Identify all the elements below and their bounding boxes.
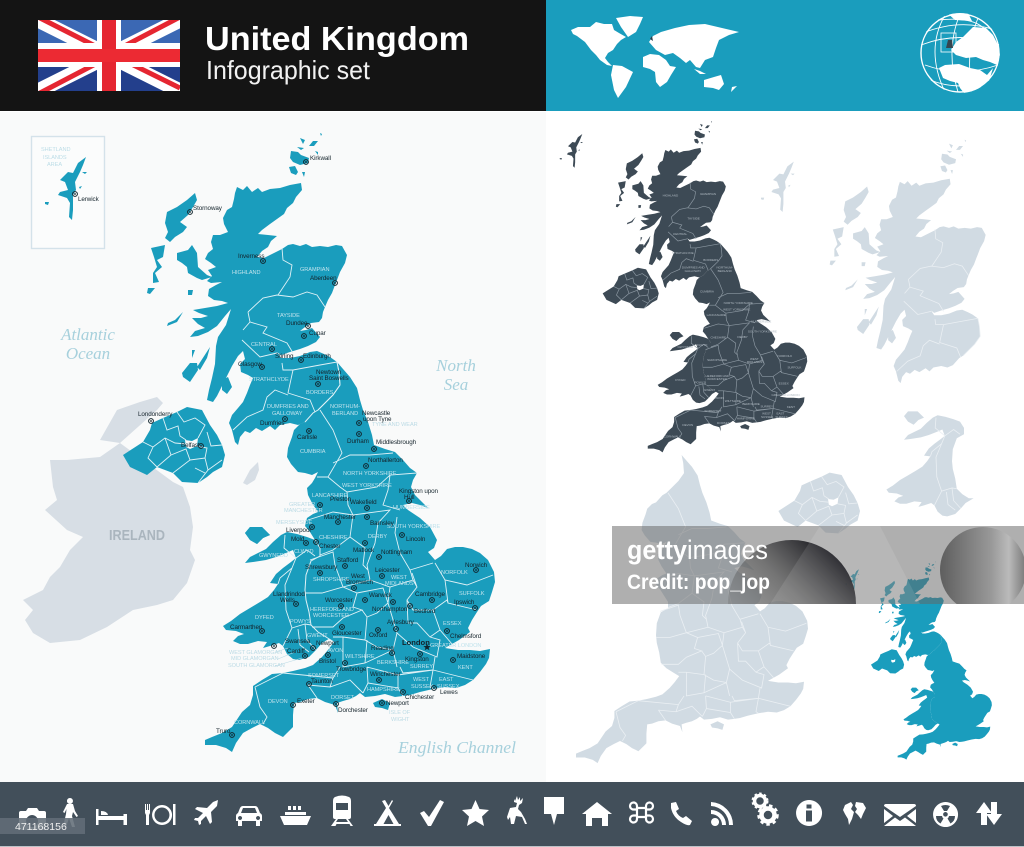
city names: Middlesbrough bbox=[376, 439, 417, 446]
city names: Bristol bbox=[319, 658, 336, 665]
city names: Nottingham bbox=[381, 549, 412, 556]
header: location panel bbox=[546, 0, 1024, 111]
icon: camera bbox=[19, 808, 46, 830]
city names: Aberdeen bbox=[310, 275, 337, 282]
city names: Saint Boswells bbox=[309, 375, 349, 382]
city names: Newport bbox=[316, 640, 339, 647]
city names: Truro bbox=[216, 728, 231, 735]
icon: tent bbox=[374, 800, 401, 826]
city names: Taunton bbox=[311, 678, 333, 685]
glamorgan leader lines bbox=[275, 648, 302, 666]
city names: Shrewsbury bbox=[305, 564, 338, 571]
city names: Edinburgh bbox=[303, 353, 331, 360]
off-map labels bbox=[228, 422, 418, 723]
city names: Aylesbury bbox=[387, 619, 415, 626]
city names: Hull bbox=[404, 494, 414, 501]
city names: Winchester bbox=[370, 671, 400, 678]
city names: Cardiff bbox=[287, 648, 305, 655]
icon: cutlery plate bbox=[152, 805, 172, 825]
icon: info bbox=[796, 800, 822, 826]
city names: Ipswich bbox=[454, 599, 475, 606]
icon: car bbox=[236, 806, 262, 826]
city names: Chester bbox=[319, 543, 340, 550]
icon: deer bbox=[507, 796, 527, 824]
city names: Manchester bbox=[324, 514, 356, 521]
icon: mail bbox=[884, 804, 916, 826]
city names: Cupar bbox=[309, 330, 326, 337]
city names: Northampton bbox=[372, 606, 408, 613]
watermark logo: gettyimages bbox=[627, 535, 768, 565]
header: title panel bbox=[0, 0, 546, 111]
map: Isle of Man bbox=[243, 462, 259, 485]
subtitle: Infographic set bbox=[206, 55, 371, 85]
city names: Swansea bbox=[285, 638, 311, 645]
city names: Norwich bbox=[465, 562, 488, 569]
icon: phone bbox=[671, 802, 692, 825]
city names: upon Tyne bbox=[363, 416, 392, 423]
icon: radiation bbox=[933, 802, 958, 827]
dark map borders bbox=[614, 183, 806, 437]
city names: Chichester bbox=[405, 694, 434, 701]
globe locator bbox=[921, 12, 1000, 93]
shetland inset box: AREA bbox=[47, 162, 62, 168]
city names: West bbox=[351, 573, 365, 580]
city names: Leicester bbox=[375, 567, 400, 574]
city names: Mold bbox=[291, 536, 305, 543]
city names: Gloucester bbox=[332, 630, 361, 637]
city names: Dumfries bbox=[260, 420, 284, 427]
map: Ireland bbox=[23, 397, 195, 643]
city names: Wakefield bbox=[350, 499, 377, 506]
icon: pin bbox=[544, 797, 564, 825]
city names: Northallerton bbox=[368, 457, 403, 464]
label: Atlantic Ocean: Atlantic bbox=[60, 325, 115, 344]
shetland inset box: ISLANDS bbox=[43, 155, 67, 161]
icon: bed bbox=[96, 809, 127, 825]
grey map: England bbox=[576, 455, 808, 763]
city names: Kirkwall bbox=[310, 155, 331, 162]
city names: Matlock bbox=[353, 547, 375, 554]
city names: Exeter bbox=[297, 698, 315, 705]
main map: United Kingdom bbox=[32, 133, 495, 752]
city names: Lincoln bbox=[406, 536, 426, 543]
city names: London bbox=[402, 638, 430, 647]
city names bbox=[78, 155, 488, 735]
city names: Stornoway bbox=[193, 205, 223, 212]
city markers bbox=[73, 160, 478, 737]
watermark artefacts bbox=[728, 526, 1024, 604]
grey map: Scotland bbox=[830, 140, 986, 383]
title: United Kingdom bbox=[205, 20, 469, 57]
city names: Worcester bbox=[325, 597, 353, 604]
city names: Kingston upon bbox=[399, 488, 439, 495]
city names: Wells bbox=[280, 597, 295, 604]
city names: Dundee bbox=[286, 320, 308, 327]
world map locator bbox=[571, 16, 739, 98]
icon: rss bbox=[711, 802, 733, 826]
dark landmass bbox=[560, 121, 807, 452]
city names: Lewes bbox=[440, 689, 458, 696]
dark map: United Kingdom bbox=[560, 121, 807, 452]
county borders bbox=[143, 248, 493, 724]
city names: Carmarthen bbox=[230, 624, 263, 631]
city names: Stirling bbox=[275, 353, 294, 360]
county labels bbox=[232, 267, 485, 726]
label: English Channel: English Channel bbox=[397, 738, 516, 757]
city names: Londonderry bbox=[138, 411, 173, 418]
city names: Durham bbox=[347, 438, 369, 445]
city names: Belfast bbox=[181, 442, 200, 449]
icon: ship bbox=[280, 806, 311, 825]
icon bar bbox=[0, 782, 1024, 847]
icon: union jack flag bbox=[38, 17, 180, 94]
city names: Lerwick bbox=[78, 196, 100, 203]
watermark panel bbox=[612, 526, 1024, 604]
city names: Barnsley bbox=[370, 520, 395, 527]
icon: gears bbox=[752, 794, 778, 824]
city names: Newport bbox=[386, 700, 409, 707]
grey map: Northern Ireland bbox=[778, 473, 860, 533]
icon: plane bbox=[194, 800, 218, 825]
city names: Trowbridge bbox=[336, 666, 367, 673]
city names: Bromwich bbox=[346, 579, 373, 586]
label: North Sea: Sea bbox=[444, 375, 468, 394]
icon: command bbox=[630, 803, 653, 822]
grey map: Wales bbox=[886, 411, 974, 516]
city names: Preston bbox=[330, 496, 352, 503]
city names: Warwick bbox=[369, 592, 393, 599]
city names: Dorchester bbox=[338, 707, 368, 714]
city names: Cambridge bbox=[415, 591, 445, 598]
icon: house bbox=[582, 802, 612, 826]
watermark credit: Credit: pop_jop bbox=[627, 571, 770, 594]
main map panel bbox=[0, 112, 546, 782]
icon: cutlery bbox=[145, 804, 176, 825]
icon: globe bbox=[843, 802, 866, 825]
icon: star bbox=[462, 800, 489, 826]
stock id tag bbox=[0, 818, 85, 834]
city names: Inverness bbox=[238, 253, 264, 260]
label: Atlantic Ocean: Ocean bbox=[66, 344, 110, 363]
city names: Maidstone bbox=[457, 653, 486, 660]
grey map: Shetland bbox=[761, 162, 795, 212]
dark map labels bbox=[663, 192, 801, 438]
icon: walker bbox=[63, 798, 78, 827]
city names: Chelmsford bbox=[450, 633, 482, 640]
city names: Newtown bbox=[316, 369, 342, 376]
icon: arrows bbox=[976, 802, 1002, 825]
shetland inset box bbox=[32, 136, 104, 248]
city names: Bedford bbox=[414, 608, 436, 615]
blue locator map bbox=[846, 562, 992, 760]
icon: check bbox=[420, 800, 444, 826]
city names: Glasgow bbox=[238, 361, 262, 368]
stock id tag: 471168156 bbox=[15, 821, 67, 833]
label: Ireland: IRELAND bbox=[109, 528, 165, 544]
city names: Llandrindod bbox=[273, 591, 305, 598]
icon: train bbox=[331, 796, 353, 826]
shetland inset box: SHETLAND bbox=[41, 147, 70, 153]
city names: Carlisle bbox=[297, 434, 318, 441]
city names: Stafford bbox=[337, 557, 359, 564]
city names: Reading bbox=[371, 645, 394, 652]
city names: Kingston bbox=[405, 656, 429, 663]
city names: Liverpool bbox=[286, 527, 311, 534]
counties bbox=[123, 133, 495, 752]
city names: Newcastle bbox=[362, 410, 391, 417]
label: North Sea: North bbox=[435, 356, 476, 375]
city names: Oxford bbox=[369, 632, 388, 639]
